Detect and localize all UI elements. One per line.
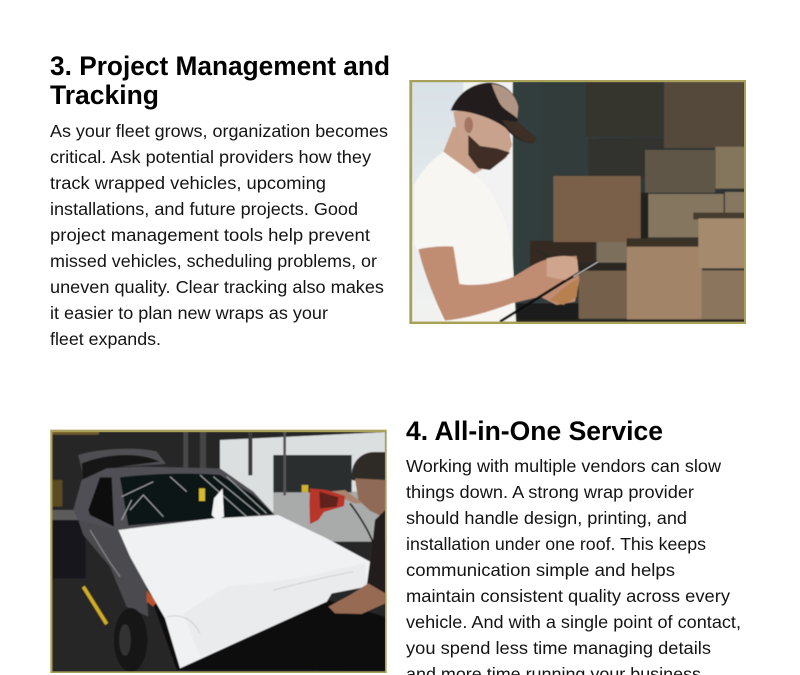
section 3 body text: track wrapped vehicles, upcoming [50,173,326,193]
section 4 body text: should handle design, printing, and [406,508,687,528]
section 3 heading: 3. Project Management and [50,51,390,81]
section 3 heading: Tracking [50,80,159,110]
section 3 body text: fleet expands. [50,329,161,349]
section 4 body text: maintain consistent quality across every [406,586,730,606]
section 3 heading [50,51,390,110]
section 3 body text: uneven quality. Clear tracking also makes [50,277,384,297]
section 3 body text [50,121,388,349]
photo: vinyl wrap applied to car in workshop [50,430,387,673]
section 3 body text: project management tools help prevent [50,225,370,245]
section 4 body text: you spend less time managing details [406,638,711,658]
section 4 body text: Working with multiple vendors can slow [406,456,722,476]
section 3 body text: missed vehicles, scheduling problems, or [50,251,377,271]
photo: worker with clipboard and boxes [409,80,747,324]
section 3 body text: it easier to plan new wraps as your [50,303,328,323]
section 3 body text: As your fleet grows, organization becomes [50,121,388,141]
section 3 body text: critical. Ask potential providers how they [50,147,371,167]
section 4 heading: 4. All-in-One Service [406,416,663,446]
section 4 body text: vehicle. And with a single point of contact, [406,612,741,632]
section 4 body text [406,456,741,675]
section 4 body text: installation under one roof. This keeps [406,534,706,554]
section 4 body text: communication simple and helps [406,560,675,580]
section 4 body text: things down. A strong wrap provider [406,482,694,502]
section 3 body text: installations, and future projects. Good [50,199,358,219]
